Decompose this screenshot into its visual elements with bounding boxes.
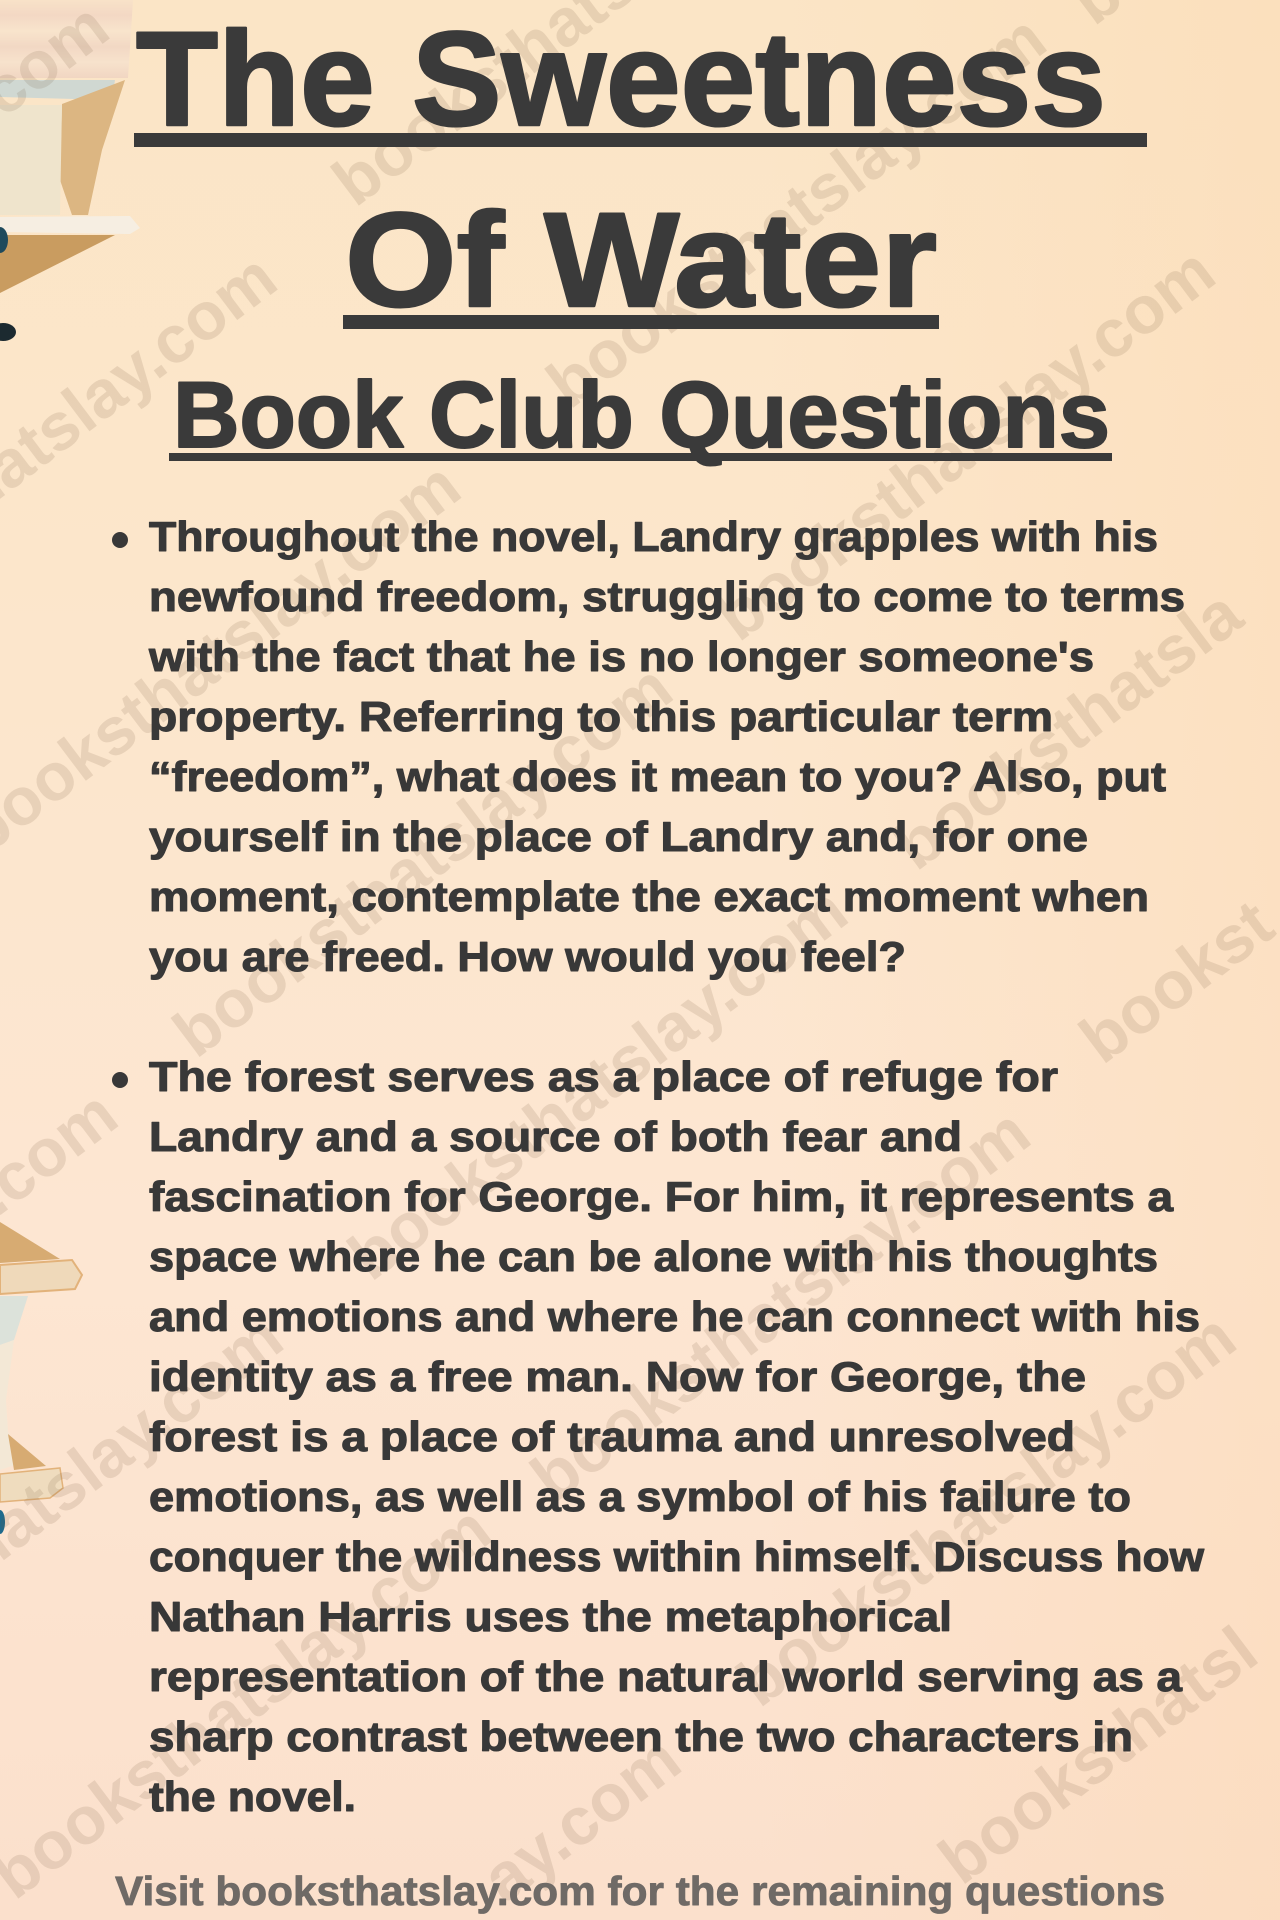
footer call to action: Visit booksthatslay.com for the remaining questions [115, 1868, 1165, 1914]
watermarks: booksthatslay.com [703, 233, 1228, 655]
question 2: sharp contrast between the two characters in [149, 1713, 1133, 1760]
subtitle: Book Club Questions [173, 362, 1110, 467]
watermarks: booksthatslay.com [518, 1094, 1043, 1516]
watermarks: booksthatslay.com [335, 872, 861, 1295]
question 2: conquer the wildness within himself. Discuss how [149, 1533, 1204, 1580]
question 1: yourself in the place of Landry and, for one [149, 813, 1088, 860]
question 1: you are freed. How would you feel? [149, 933, 906, 980]
title: Of Water [345, 186, 937, 335]
question 2: forest is a place of trauma and unresolved [149, 1413, 1075, 1460]
question 1 [112, 513, 1185, 980]
question 1: property. Referring to this particular term [149, 693, 1053, 740]
question 2: the novel. [149, 1773, 356, 1820]
illustration: top book stack [0, 0, 140, 341]
question 2: space where he can be alone with his thoughts [149, 1233, 1158, 1280]
question 2: identity as a free man. Now for George, the [149, 1353, 1086, 1400]
watermarks: ay.com [469, 1721, 694, 1917]
question 2: Landry and a source of both fear and [149, 1113, 962, 1160]
question 2: representation of the natural world serving as a [149, 1653, 1183, 1700]
question 2: and emotions and where he can connect with his [149, 1293, 1200, 1340]
question 1: with the fact that he is no longer someone's [148, 633, 1094, 680]
watermarks: booksthatslay.com [723, 1299, 1249, 1721]
question 2: fascination for George. For him, it represents a [149, 1173, 1174, 1220]
watermarks: booksthatslay.com [534, 0, 1059, 422]
question 1: moment, contemplate the exact moment when [149, 873, 1149, 920]
question 1: “freedom”, what does it mean to you? Also, put [149, 753, 1166, 800]
illustration: lower book stack [0, 1222, 82, 1534]
question 2: The forest serves as a place of refuge for [149, 1053, 1058, 1100]
question 2 [112, 1053, 1204, 1820]
question 2: emotions, as well as a symbol of his failure to [149, 1473, 1131, 1520]
watermarks: booksthatsla [880, 575, 1256, 884]
question 1: newfound freedom, struggling to come to terms [149, 573, 1185, 620]
watermarks: booksthatslay.com [160, 649, 686, 1072]
question 1: Throughout the novel, Landry grapples with his [149, 513, 1158, 560]
question 2: Nathan Harris uses the metaphorical [149, 1593, 952, 1640]
title [134, 5, 1147, 335]
watermarks: booksthatsl [926, 1612, 1271, 1898]
title: The Sweetness [136, 5, 1106, 154]
